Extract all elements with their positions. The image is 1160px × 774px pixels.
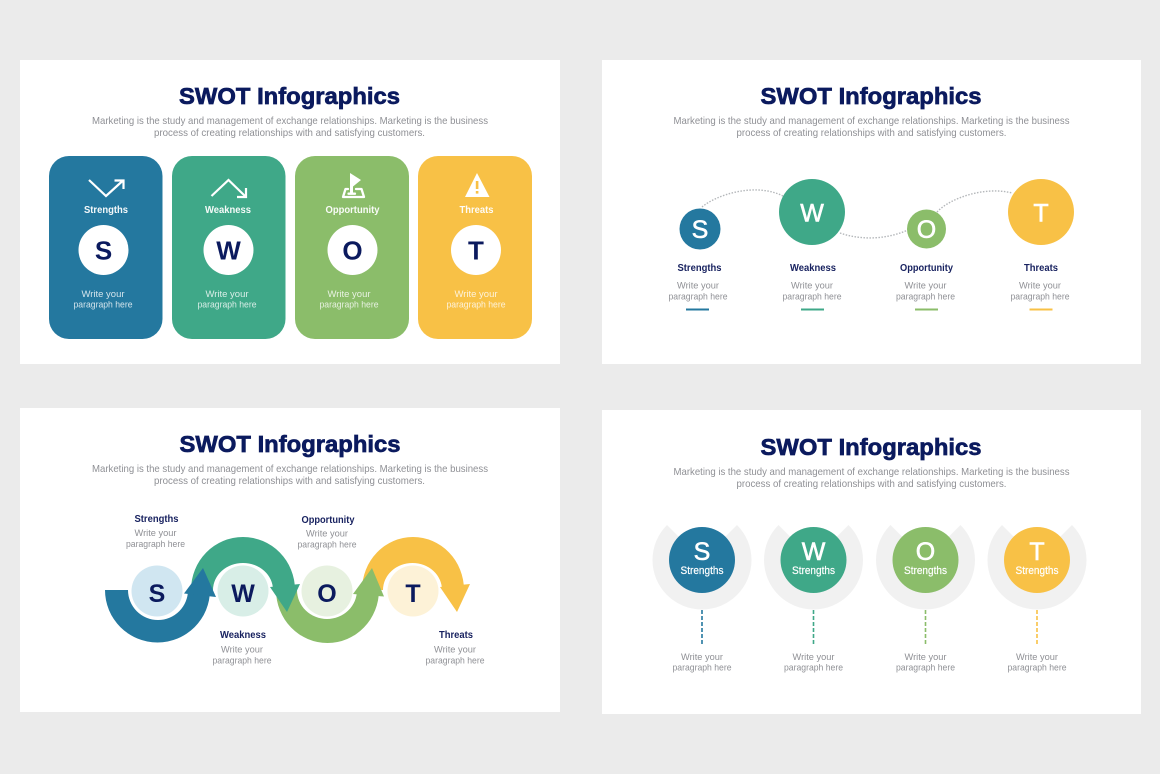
intro text: process of creating relationships with and satisfying customers. (154, 127, 425, 139)
item: Threats: Write your (434, 644, 476, 656)
paragraph: paragraph here (198, 300, 256, 310)
item: S: paragraph here (672, 662, 732, 674)
item: Opportunity (896, 263, 955, 310)
paragraph (446, 289, 506, 310)
item: Strengths: paragraph here (668, 292, 728, 302)
letter circles: S (149, 580, 165, 608)
intro text: Marketing is the study and management of exchange relationships. Marketing is the business (92, 115, 488, 127)
item: Strengths: Write your (677, 280, 719, 292)
paragraph (74, 289, 132, 310)
item: Opportunity: Opportunity (302, 515, 355, 526)
item: O: Write your (904, 652, 946, 663)
item: Weakness (782, 263, 842, 310)
paragraph: Write your (454, 289, 498, 300)
intro text: Marketing is the study and management of exchange relationships. Marketing is the business (674, 115, 1070, 127)
item: T: T (1029, 538, 1045, 566)
paragraph: Write your (328, 289, 370, 300)
card: Strengths (49, 156, 162, 339)
paragraph (320, 289, 378, 310)
letter circles: W (231, 580, 255, 608)
card: Opportunity (295, 156, 409, 339)
item: O: O (916, 538, 935, 566)
label: Opportunity: Opportunity (326, 205, 380, 216)
arrow: blue (105, 568, 216, 642)
item: Threats: paragraph here (1010, 292, 1070, 302)
item: Opportunity: paragraph here (896, 292, 955, 302)
badge: W: W (216, 236, 241, 266)
node: W: W (800, 200, 824, 228)
arrow: yellow (362, 537, 470, 612)
panel: SWOT open rings (602, 410, 1141, 714)
item: Opportunity (298, 515, 356, 550)
badge: T: T (468, 236, 484, 266)
item: S: Strengths (680, 565, 724, 577)
item: Opportunity: Opportunity (900, 263, 953, 274)
badge: S: S (95, 236, 112, 266)
node: O (907, 210, 946, 248)
panel: SWOT cards (20, 60, 560, 364)
item: T: Write your (1016, 652, 1058, 663)
badge: O: O (342, 236, 363, 266)
paragraph: Write your (206, 289, 248, 300)
title: SWOT Infographics (760, 434, 982, 460)
card: Weakness (172, 156, 286, 339)
item: Strengths (126, 514, 185, 550)
item: Weakness: Write your (791, 280, 833, 292)
label: Weakness: Weakness (205, 205, 251, 216)
paragraph: paragraph here (446, 300, 506, 310)
item: S: Write your (681, 652, 723, 663)
node: S: S (692, 216, 708, 244)
item: W: Strengths (792, 565, 835, 577)
item: Weakness: Weakness (220, 630, 266, 641)
arrow: light green (276, 568, 384, 643)
intro text (674, 466, 1070, 490)
badge: O (328, 225, 378, 275)
intro text: Marketing is the study and management of exchange relationships. Marketing is the business (674, 466, 1070, 478)
item: O: Strengths (904, 565, 947, 577)
item: Strengths: Strengths (678, 263, 722, 274)
icon: flag on tray (343, 173, 364, 197)
intro text: process of creating relationships with and satisfying customers. (736, 127, 1006, 139)
item: O (876, 525, 975, 674)
panel: SWOT wave arrows (20, 408, 560, 712)
item: Threats: Threats (439, 630, 473, 641)
item: T: paragraph here (1008, 662, 1066, 674)
item: Opportunity: Write your (306, 528, 348, 540)
item: Threats (426, 630, 484, 666)
item: Strengths (668, 263, 728, 310)
intro text (92, 463, 488, 487)
item: Weakness: Write your (221, 644, 263, 656)
item: Weakness (212, 630, 272, 666)
letter circles (132, 566, 438, 616)
label: Threats: Threats (460, 205, 494, 216)
badge: T (451, 225, 501, 275)
label: Strengths: Strengths (84, 205, 128, 216)
item: Strengths: paragraph here (126, 539, 185, 550)
node: T: T (1033, 200, 1049, 228)
intro text (674, 115, 1070, 139)
item: W: W (802, 538, 826, 566)
letter circles: T (405, 580, 421, 608)
item: Threats: paragraph here (426, 656, 484, 666)
item: Strengths: Strengths (134, 514, 179, 525)
letter circles: O (317, 580, 337, 608)
icon: warning triangle (465, 173, 490, 197)
item: Opportunity: paragraph here (298, 540, 356, 550)
card: Threats (418, 156, 532, 339)
paragraph: paragraph here (74, 300, 132, 310)
item: O: paragraph here (896, 662, 955, 674)
badge: W (204, 225, 254, 275)
title: SWOT Infographics (180, 431, 400, 457)
item: W: Write your (792, 652, 834, 663)
item: S: S (694, 538, 710, 566)
panel: SWOT dotted path (602, 60, 1141, 364)
title: SWOT Infographics (179, 83, 400, 109)
intro text: process of creating relationships with and satisfying customers. (736, 478, 1006, 490)
paragraph: Write your (82, 289, 124, 300)
badge: S (78, 225, 128, 275)
intro text (92, 115, 488, 139)
paragraph: paragraph here (320, 300, 378, 310)
item: Weakness: paragraph here (782, 292, 842, 302)
paragraph (198, 289, 256, 310)
item: W: paragraph here (784, 662, 843, 674)
item: Weakness: Weakness (790, 263, 836, 274)
node: O: O (917, 216, 936, 244)
item: Opportunity: Write your (904, 280, 946, 292)
title: SWOT Infographics (760, 83, 982, 109)
item: S (652, 525, 751, 674)
intro text: Marketing is the study and management of exchange relationships. Marketing is the business (92, 463, 488, 475)
item: Threats: Threats (1024, 263, 1058, 274)
item: Threats (1010, 263, 1070, 310)
item: T: Strengths (1016, 565, 1059, 577)
arrow: teal (191, 537, 300, 612)
item: Threats: Write your (1019, 280, 1061, 292)
node: S (680, 208, 720, 250)
node: T (1008, 179, 1074, 245)
item: Weakness: paragraph here (212, 656, 272, 666)
icon: falling arrow (212, 180, 246, 197)
node: W (779, 179, 845, 245)
dotted connector (702, 190, 1012, 238)
icon: rising arrow (89, 180, 124, 196)
item: Strengths: Write your (134, 528, 176, 539)
item: T (987, 525, 1086, 674)
item: W (764, 525, 863, 674)
intro text: process of creating relationships with and satisfying customers. (154, 475, 425, 487)
